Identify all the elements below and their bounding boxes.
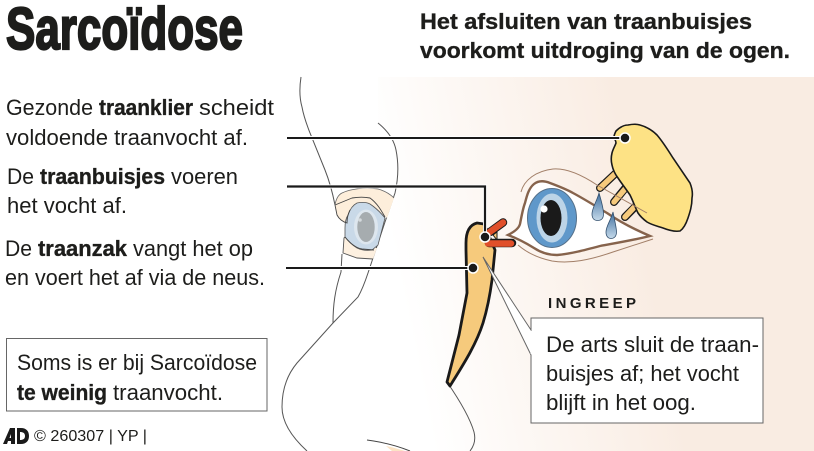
callout: ingreep: De arts sluit de traan- (546, 332, 759, 357)
text block: traanzak (5, 236, 265, 290)
tear sac and duct (447, 223, 495, 386)
icon: nostril shade (386, 446, 405, 451)
text block: traanklier: scheidt (199, 95, 274, 120)
leader line: traanzak (286, 263, 478, 273)
leader line: traanklier (287, 133, 630, 143)
text block: traanbuisjes: traanbuisjes (40, 164, 165, 189)
callout: te weinig traanvocht (6, 338, 267, 411)
icon: tear drops (592, 193, 616, 238)
subtitle: voorkomt uitdroging van de ogen. (420, 38, 790, 63)
text block: traanbuisjes: voeren (171, 164, 238, 189)
text block: traanbuisjes (7, 164, 238, 218)
callout: te weinig traanvocht: te weinig (17, 380, 107, 405)
leader line: traanbuisjes (287, 186, 490, 242)
credit line: © 260307 | YP | (34, 428, 147, 445)
subtitle (420, 9, 790, 63)
label: ingreep: INGREEP (548, 295, 638, 312)
callout: ingreep: buisjes af; het vocht (546, 361, 739, 386)
text block: traanklier: voldoende traanvocht af. (6, 125, 248, 150)
icon: eye (508, 169, 653, 262)
text block: traanklier: traanklier (99, 95, 193, 120)
callout: ingreep: blijft in het oog. (546, 390, 696, 415)
text block: traanzak: en voert het af via de neus. (5, 265, 265, 290)
callout: te weinig traanvocht: traanvocht. (113, 380, 223, 405)
callout: te weinig traanvocht: Soms is er bij Sarcoïdose (17, 350, 257, 375)
text block: traanbuisjes: De (7, 164, 34, 189)
icon: side eye (335, 188, 394, 259)
logo: AD (3, 428, 29, 444)
text block: traanbuisjes: het vocht af. (7, 193, 127, 218)
text block: traanzak: traanzak (38, 236, 128, 261)
subtitle: Het afsluiten van traanbuisjes (420, 9, 752, 34)
face outline (282, 77, 475, 451)
text block: traanzak: vangt het op (133, 236, 253, 261)
text block: traanklier: Gezonde (6, 95, 93, 120)
icon: lacrimal gland (600, 124, 692, 231)
callout: ingreep (483, 257, 763, 423)
text block: traanklier (6, 95, 274, 150)
text block: traanzak: De (5, 236, 32, 261)
tear ducts (red) (488, 222, 512, 244)
skin background (282, 77, 814, 451)
